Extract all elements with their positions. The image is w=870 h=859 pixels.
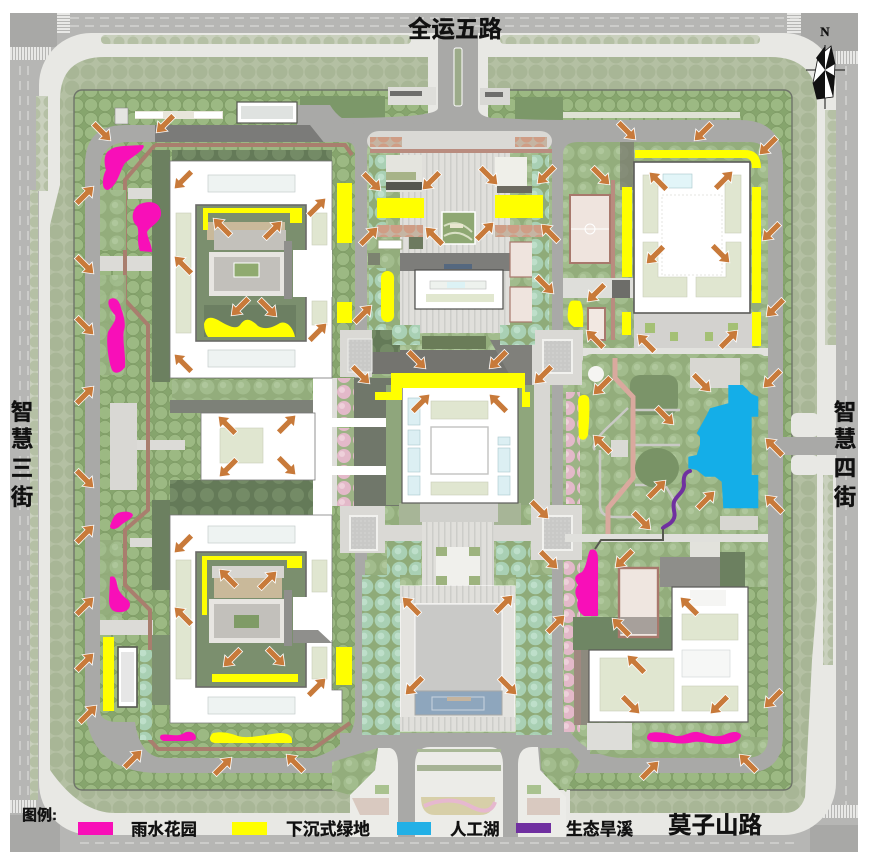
arrow — [536, 219, 564, 247]
west annex building — [118, 647, 137, 707]
arrow — [643, 475, 671, 503]
arrow — [169, 349, 197, 377]
legend swatch: sunken green — [232, 822, 267, 835]
building C: south west office — [170, 515, 342, 723]
arrow — [760, 490, 788, 518]
garden strip west — [100, 142, 355, 758]
garden tree clusters west — [100, 190, 312, 740]
building E: central hall — [402, 387, 518, 503]
arrow — [651, 402, 679, 430]
arrow — [734, 749, 762, 777]
artificial lake — [688, 385, 758, 508]
arrow — [759, 685, 787, 713]
arrow — [407, 389, 435, 417]
road name: east: 街 — [834, 485, 856, 510]
north gate buttresses — [388, 87, 510, 105]
arrow — [88, 118, 116, 146]
arrow — [347, 361, 375, 389]
arrow — [617, 691, 645, 719]
arrow — [273, 410, 301, 438]
arrow — [689, 118, 717, 146]
arrow — [610, 545, 638, 573]
arrow — [303, 193, 331, 221]
arrow — [644, 167, 672, 195]
road name: east — [834, 400, 856, 510]
pink tree row — [564, 392, 580, 732]
underground ramp shadow — [155, 125, 330, 150]
arrow — [119, 745, 147, 773]
southeast garden — [573, 542, 768, 754]
arrow — [71, 592, 99, 620]
arrow — [169, 251, 197, 279]
arrow — [582, 279, 610, 307]
plaza tree clusters — [362, 541, 552, 735]
arrow — [151, 110, 179, 138]
arrow — [632, 329, 660, 357]
arrow — [214, 564, 242, 592]
arrow — [169, 602, 197, 630]
drainage pipe line — [595, 529, 663, 549]
arrow — [358, 168, 386, 196]
arrow — [675, 592, 703, 620]
arrow — [475, 162, 503, 190]
white link column — [313, 376, 400, 516]
roof grid — [208, 175, 295, 367]
arrow — [622, 650, 650, 678]
dark garage band north of central building — [370, 253, 535, 388]
site green — [74, 90, 792, 790]
building G: south east office — [589, 587, 748, 722]
arrow — [304, 318, 332, 346]
lawn strips — [176, 560, 327, 679]
runoff arrows — [71, 110, 789, 784]
building B: west hall — [201, 413, 315, 480]
arrow — [641, 241, 669, 269]
tree columns centre — [369, 155, 549, 345]
arrow — [587, 162, 615, 190]
arrow — [254, 294, 282, 322]
legend label: lake: 人工湖 — [450, 820, 500, 839]
road name: west: 三 — [11, 456, 33, 481]
legend swatch: dry creek — [516, 823, 551, 833]
building: north centre — [415, 270, 503, 309]
courtyard — [196, 552, 332, 687]
arrow — [692, 486, 720, 514]
north planting strip — [563, 112, 740, 118]
building A: north west office — [170, 161, 332, 378]
arrow — [397, 592, 425, 620]
arrow — [494, 672, 522, 700]
north pavilion — [237, 102, 297, 123]
road name: north: 全运五路 — [408, 16, 502, 42]
north arrow compass: N — [820, 24, 830, 39]
arrow — [259, 216, 287, 244]
east block — [563, 142, 768, 758]
arrow — [607, 613, 635, 641]
arrow — [707, 240, 735, 268]
arrow — [613, 117, 641, 145]
arrow — [484, 346, 512, 374]
basin road — [565, 534, 768, 542]
rain garden: magenta patches — [103, 145, 741, 744]
road name: west: 慧 — [11, 427, 33, 452]
arrow — [471, 217, 499, 245]
paved squares — [340, 330, 583, 560]
legend label: sunken green: 下沉式绿地 — [286, 819, 370, 839]
arrow — [715, 325, 743, 353]
road name: west: 街 — [11, 485, 33, 510]
road name: east: 慧 — [834, 427, 856, 452]
arrow — [761, 294, 789, 322]
arrow — [349, 300, 377, 328]
arrow — [71, 181, 99, 209]
arrow — [273, 452, 301, 480]
arrow — [262, 643, 290, 671]
arrow — [636, 756, 664, 784]
road name: east: 智 — [834, 400, 856, 425]
shaded lawn west of buildings — [152, 150, 332, 705]
arrow — [420, 222, 448, 250]
north dark lawns — [300, 96, 563, 121]
arrow — [588, 372, 616, 400]
north arrow compass — [806, 24, 845, 109]
road name: east: 四 — [834, 456, 856, 481]
arrow — [71, 648, 99, 676]
arrow — [760, 433, 788, 461]
road name: west: 智 — [11, 400, 33, 425]
arrow — [169, 166, 197, 194]
arrow — [688, 369, 716, 397]
corridor shadow — [354, 378, 400, 506]
arrow — [209, 752, 237, 780]
arrow — [542, 610, 570, 638]
legend — [22, 807, 633, 839]
pink trees south corridor — [337, 475, 354, 506]
arrow — [417, 167, 445, 195]
arrow — [71, 312, 99, 340]
arrow — [490, 590, 518, 618]
central green beside building — [386, 385, 550, 525]
road name: south: 莫子山路 — [668, 812, 762, 838]
arrow — [484, 389, 512, 417]
arrow — [303, 673, 331, 701]
arrow — [400, 672, 428, 700]
north gate road — [340, 30, 570, 140]
south gate — [332, 733, 580, 837]
arrow — [71, 381, 99, 409]
arrow — [214, 454, 242, 482]
arrow — [226, 293, 254, 321]
arrow — [71, 251, 99, 279]
pink trees west of central building — [337, 378, 354, 418]
ecological dry creek — [663, 471, 690, 528]
glass roofs — [408, 398, 510, 495]
arrow — [628, 507, 656, 535]
arrow — [581, 325, 609, 353]
arrow — [71, 465, 99, 493]
courtyard — [196, 205, 332, 341]
arrow — [218, 644, 246, 672]
building F: north east gymnasium — [634, 162, 750, 313]
legend swatch: rain garden — [78, 822, 113, 835]
arrow — [705, 691, 733, 719]
arrow — [254, 566, 282, 594]
arrow — [529, 361, 557, 389]
street trees east and west — [30, 96, 836, 800]
arrow — [71, 520, 99, 548]
arrow — [355, 222, 383, 250]
lawn strips — [176, 213, 327, 333]
legend label: dry creek: 生态旱溪 — [566, 819, 633, 839]
roof grid — [208, 526, 295, 714]
arrow — [281, 749, 309, 777]
arrow — [757, 218, 785, 246]
west paved squares — [100, 108, 223, 635]
arrow — [754, 132, 782, 160]
brick walkway — [125, 145, 352, 749]
arrow — [208, 213, 236, 241]
legend label: rain garden: 雨水花园 — [131, 820, 197, 839]
inner road ring — [85, 105, 783, 773]
arrow — [758, 365, 786, 393]
central block — [365, 131, 552, 733]
arrow — [532, 161, 560, 189]
arrow — [169, 530, 197, 558]
road name: west — [11, 400, 33, 510]
arrow — [588, 430, 616, 458]
legend swatch: lake — [397, 822, 431, 835]
arrow — [710, 166, 738, 194]
arrow — [535, 546, 563, 574]
arrow — [526, 496, 554, 524]
central north plaza — [367, 131, 552, 333]
street trees north — [101, 35, 760, 44]
sunken green space: yellow patches — [103, 150, 761, 743]
outer green belt — [50, 57, 817, 813]
arrow — [403, 346, 431, 374]
east gate road — [783, 413, 837, 475]
north east forecourt — [582, 313, 768, 356]
arrow — [213, 411, 241, 439]
legend title: 图例: — [22, 807, 57, 824]
arrow — [531, 271, 559, 299]
lake garden — [582, 354, 768, 540]
courts — [510, 142, 635, 340]
pink trees lower corridor — [337, 428, 354, 466]
plaza south — [400, 522, 515, 731]
arrow — [74, 700, 102, 728]
